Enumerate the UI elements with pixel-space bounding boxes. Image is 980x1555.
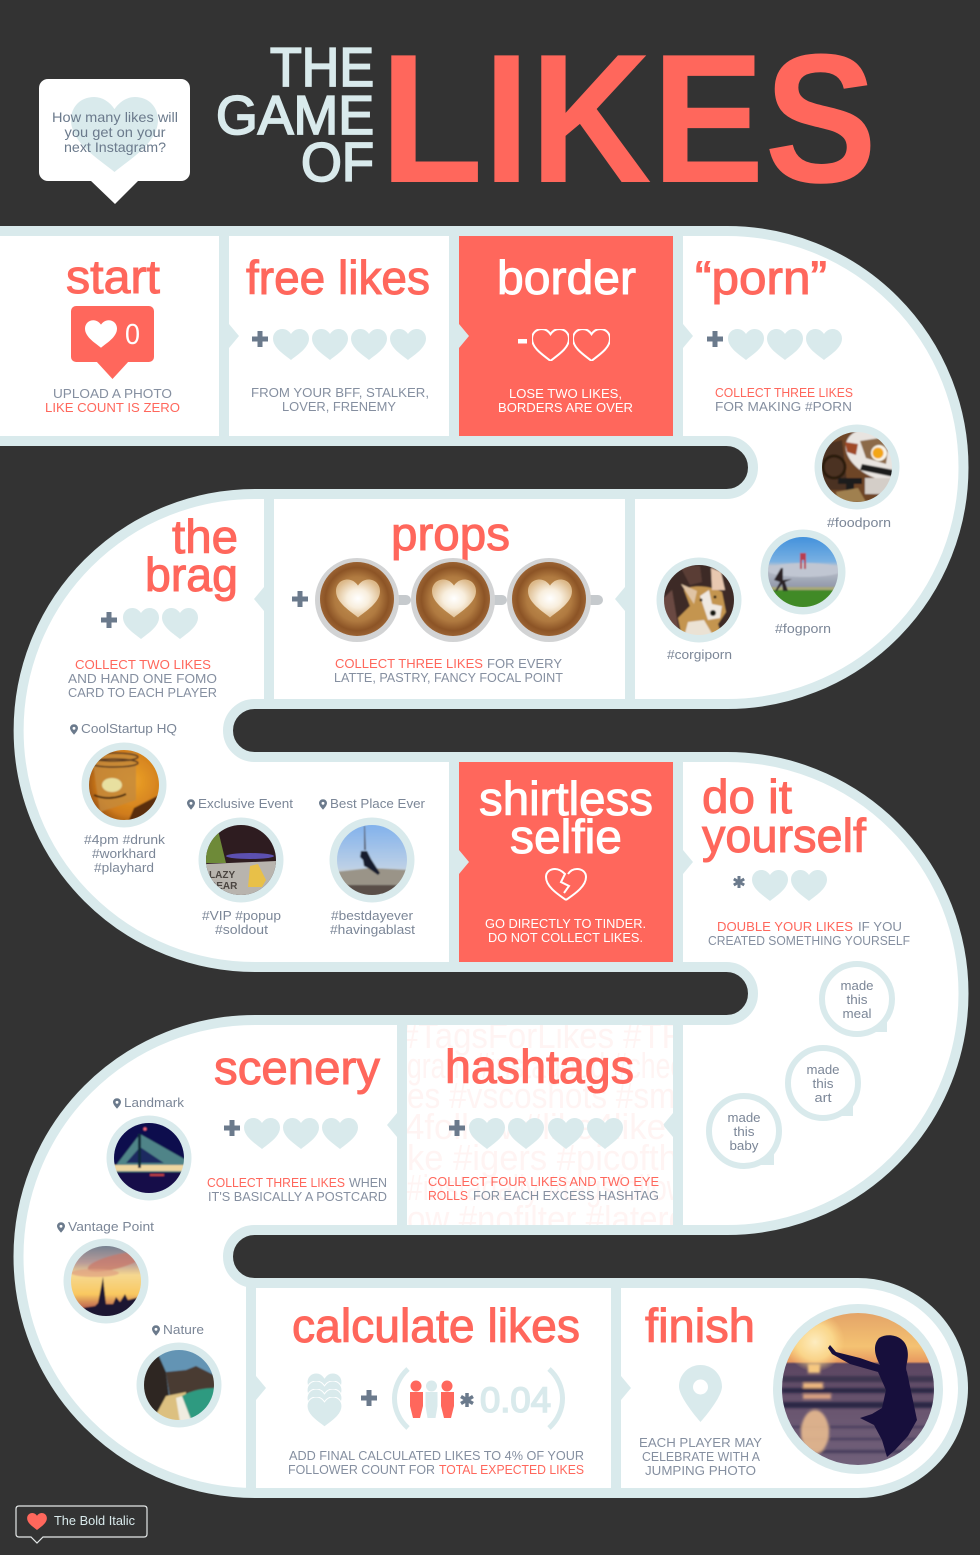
background hashtag wall: ow #nofilter #laterg (407, 1198, 687, 1239)
panel: finish: finish (645, 1299, 755, 1352)
panel: free likes: FROM YOUR BFF, STALKER, (251, 385, 429, 400)
bubble: made this baby (709, 1096, 779, 1166)
photo: corgiporn (656, 558, 742, 642)
panel: scenery: scenery (214, 1041, 380, 1094)
background hashtag wall: #TagsForLikes #TFL (400, 1015, 700, 1056)
label: fogporn: #fogporn (775, 621, 831, 636)
panel: finish: JUMPING PHOTO (645, 1463, 756, 1478)
title: GAME (216, 84, 374, 146)
panel: props (292, 507, 603, 685)
icon: latte cup three (507, 558, 603, 642)
panel: free likes: LOVER, FRENEMY (282, 399, 396, 414)
panel: scenery (207, 1041, 387, 1204)
panel: border: LOSE TWO LIKES, (509, 386, 622, 401)
label: foodporn: #foodporn (827, 515, 891, 530)
panel: hashtags: ROLLS (428, 1188, 468, 1203)
panel: the brag (68, 510, 238, 700)
panel: start: UPLOAD A PHOTO (53, 386, 172, 401)
coral panel: border (459, 236, 673, 436)
panel: porn: “porn” (695, 251, 827, 304)
panel: do it yourself: yourself (702, 809, 867, 862)
panel: shirtless selfie: DO NOT COLLECT LIKES. (488, 930, 643, 945)
background hashtag wall: 4follow #like4like # (405, 1106, 695, 1147)
icon: location pin (679, 1365, 722, 1422)
panel: hashtags (407, 1025, 673, 1225)
coral panel: shirtless selfie (459, 762, 673, 962)
icon: multiply sign (734, 876, 744, 888)
icon: four hearts (469, 1118, 623, 1149)
panel: porn: FOR MAKING #PORN (715, 399, 852, 414)
location: Landmark: Landmark (124, 1095, 185, 1110)
icon: person one (410, 1380, 423, 1418)
panel: free likes (246, 251, 430, 414)
panel: the brag: AND HAND ONE FOMO (68, 671, 217, 686)
panel: calculate likes: calculate likes (292, 1299, 580, 1352)
icon: plus sign (292, 591, 308, 607)
icon: plus sign (361, 1390, 377, 1406)
photo: jumping at sunset (773, 1304, 943, 1474)
icon: like counter: 0 (125, 319, 140, 351)
logo: The Bold Italic: The Bold Italic (54, 1513, 135, 1528)
icon: plus sign (224, 1120, 240, 1136)
icon: plus sign (707, 331, 723, 347)
panel: border (497, 251, 636, 415)
speech bubble callout: you get on your (64, 124, 166, 140)
panel: start: LIKE COUNT IS ZERO (45, 400, 180, 415)
icon: like counter (71, 306, 154, 379)
panel: border: border (497, 251, 636, 304)
panel: finish (639, 1299, 762, 1478)
label: 4pm hashtags (84, 832, 166, 875)
bubble: made this art (788, 1048, 858, 1118)
panel: props: LATTE, PASTRY, FANCY FOCAL POINT (334, 670, 563, 685)
label: 4pm hashtags: #workhard (92, 846, 156, 861)
icon: stacked hearts (307, 1373, 342, 1427)
icon: latte cup two (411, 558, 507, 642)
bubble: made this art: art (814, 1090, 832, 1105)
location: Exclusive Event: Exclusive Event (198, 796, 293, 811)
formula: followers times 0.04 (394, 1369, 562, 1428)
photo: mason jar (82, 742, 166, 828)
photo: skyline sunset (64, 1238, 148, 1324)
icon: multiply sign (461, 1393, 473, 1407)
panel: finish: EACH PLAYER MAY (639, 1435, 762, 1450)
panel: props: FOR EVERY (487, 656, 562, 671)
panel: border: BORDERS ARE OVER (498, 400, 633, 415)
label: bestdayever hashtags (330, 908, 415, 937)
panel: calculate likes: ADD FINAL CALCULATED LIKES TO 4% OF YOUR (289, 1448, 584, 1463)
bubble: made this meal: meal (842, 1006, 872, 1021)
panel: calculate likes: TOTAL EXPECTED LIKES (439, 1462, 584, 1477)
icon: person two (426, 1380, 438, 1418)
label: 4pm hashtags: #4pm #drunk (84, 832, 166, 847)
bubble: made this meal (822, 964, 892, 1034)
icon: plus sign (449, 1120, 465, 1136)
icon: three hearts (728, 329, 842, 360)
icon: three hearts (244, 1118, 358, 1149)
photo: foodporn (814, 424, 900, 510)
panel: finish: CELEBRATE WITH A (642, 1449, 760, 1464)
panel: porn: COLLECT THREE LIKES (715, 385, 853, 400)
background hashtag wall (407, 1025, 673, 1225)
panel: hashtags: FOR EACH EXCESS HASHTAG (473, 1188, 659, 1203)
panel: free likes: free likes (246, 251, 430, 304)
panel: hashtags: hashtags (445, 1040, 634, 1093)
photo: fogporn (760, 530, 846, 614)
speech bubble callout: How many likes will (52, 109, 178, 125)
panel: the brag: COLLECT TWO LIKES (75, 657, 211, 672)
panel: do it yourself: IF YOU (858, 919, 902, 934)
icon: minus and outlined hearts (518, 329, 610, 361)
location: Vantage Point: Vantage Point (68, 1219, 154, 1234)
panel: props: COLLECT THREE LIKES (335, 656, 483, 671)
panel: the brag: brag (145, 548, 238, 601)
panel: scenery: WHEN (349, 1175, 387, 1190)
panel: scenery: COLLECT THREE LIKES (207, 1175, 345, 1190)
photo: coastline (136, 1342, 222, 1428)
location: CoolStartup HQ: CoolStartup HQ (81, 721, 177, 736)
background hashtag wall: #instadaily #tagsfollow (407, 1167, 688, 1208)
panel: calculate likes: FOLLOWER COUNT FOR (288, 1462, 435, 1477)
bubble: made this baby: this (734, 1124, 755, 1139)
label: VIP hashtags (202, 908, 281, 937)
icon: two hearts (752, 870, 827, 901)
panel: shirtless selfie: GO DIRECTLY TO TINDER. (485, 916, 646, 931)
title: OF (301, 131, 374, 193)
photo: lazy bear: LAZY (209, 870, 235, 881)
label: 4pm hashtags: #playhard (94, 860, 154, 875)
panel: do it yourself: DOUBLE YOUR LIKES (717, 919, 853, 934)
panel: shirtless selfie: selfie (510, 810, 622, 863)
speech bubble callout: next Instagram? (64, 139, 166, 155)
panel: hashtags: COLLECT FOUR LIKES AND TWO EYE (428, 1174, 659, 1189)
icon: person three (441, 1380, 454, 1418)
panel: shirtless selfie (479, 772, 653, 945)
icon: latte cup one (315, 558, 411, 642)
title: THE (270, 36, 374, 98)
icon: plus sign (101, 612, 117, 628)
panel: scenery: IT'S BASICALLY A POSTCARD (208, 1189, 387, 1204)
location: Best Place Ever: Best Place Ever (330, 796, 426, 811)
location: Nature: Nature (163, 1322, 204, 1337)
title: LIKES (380, 15, 877, 221)
label: corgiporn: #corgiporn (667, 647, 732, 662)
bubble: made this baby: made (728, 1110, 760, 1125)
panel: props: props (391, 507, 510, 560)
panel: start (45, 250, 180, 415)
icon: four hearts (273, 329, 426, 360)
photo: lazy bear: BEAR (209, 881, 238, 892)
panel: calculate likes (288, 1299, 584, 1477)
panel: porn (695, 251, 853, 414)
panel: do it yourself: CREATED SOMETHING YOURSELF (708, 933, 910, 948)
bubble: made this art: this (812, 1076, 834, 1091)
background hashtag wall: ke #igers #picofthe (407, 1137, 697, 1178)
photo: bridge at night (106, 1116, 192, 1200)
panel: do it yourself (702, 770, 910, 948)
label: VIP hashtags: #VIP #popup (202, 908, 281, 923)
label: VIP hashtags: #soldout (215, 922, 268, 937)
snake board outline (0, 231, 963, 1493)
logo: The Bold Italic (16, 1506, 147, 1543)
bubble: made this art: made (806, 1062, 840, 1077)
speech bubble callout (39, 79, 190, 204)
formula: followers times 0.04: 0.04 (480, 1381, 551, 1420)
photo: rope swing (330, 818, 414, 902)
photo: lazy bear (198, 818, 284, 902)
panel: do it yourself: do it (702, 770, 792, 823)
panel dividers with arrows (219, 231, 693, 1493)
bubble: made this meal: this (846, 992, 868, 1007)
label: bestdayever hashtags: #bestdayever (331, 908, 414, 923)
panel: shirtless selfie: shirtless (479, 772, 653, 825)
label: bestdayever hashtags: #havingablast (330, 922, 415, 937)
panel: the brag: CARD TO EACH PLAYER (68, 685, 217, 700)
background hashtag wall: es #vscoshots #smile (407, 1075, 707, 1116)
icon: broken heart (546, 869, 586, 900)
background hashtag wall: gram #instagood #check (407, 1045, 698, 1086)
bubble: made this meal: made (840, 978, 874, 993)
icon: two hearts (123, 608, 198, 639)
icon: plus sign (252, 331, 268, 347)
panel: start: start (66, 250, 160, 303)
bubble: made this baby: baby (730, 1138, 759, 1153)
panel: the brag: the (172, 510, 238, 563)
